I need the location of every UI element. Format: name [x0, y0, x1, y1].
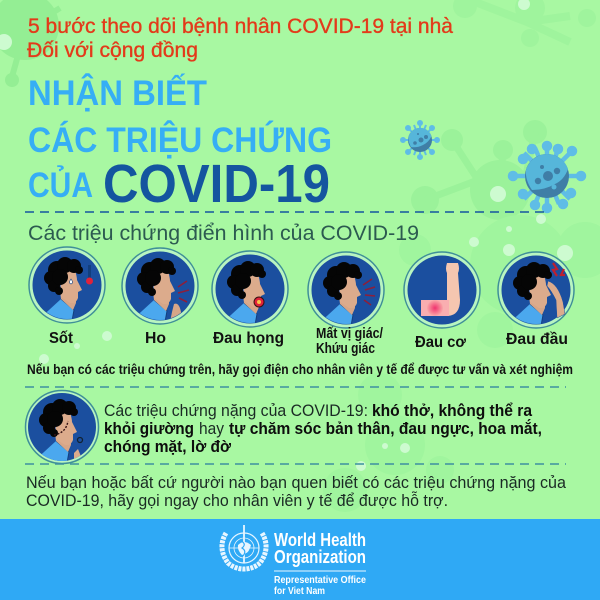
- panel: headache: [498, 252, 574, 348]
- label: sore throat: Đau họng: [213, 330, 284, 347]
- label: headache: Đau đầu: [506, 331, 568, 348]
- icon: sore throat: [212, 251, 288, 329]
- text: organisation name: Organization: [274, 547, 366, 567]
- panel: cough: [122, 248, 198, 347]
- text: organisation name: [274, 530, 366, 597]
- title: program heading: 5 bước theo dõi bệnh nhân COVID-19 tại nhà: [28, 15, 453, 38]
- text: call health worker: [26, 474, 567, 510]
- text: organisation name: for Viet Nam: [274, 586, 325, 597]
- label: muscle pain: Đau cơ: [415, 334, 467, 351]
- icon: WHO emblem: [222, 525, 266, 569]
- text: severe symptoms: chóng mặt, lờ đờ: [104, 438, 231, 456]
- subheading: typical symptoms: Các triệu chứng điển hình của COVID-19: [28, 222, 419, 245]
- heading: recognise symptoms of COVID-19: COVID-19: [103, 154, 330, 214]
- panel: sore throat: [212, 251, 288, 347]
- panel: fever: [29, 247, 105, 347]
- heading: recognise symptoms of COVID-19: CỦA: [28, 165, 93, 205]
- divider: [25, 386, 566, 388]
- panel: severe symptoms: [26, 390, 542, 467]
- icon: small virus: [401, 121, 439, 159]
- panel: loss of taste and smell: [308, 252, 384, 357]
- text: call health worker: Nếu bạn hoặc bất cứ người nào bạn quen biết có các triệu chứng nặng của: [26, 474, 567, 492]
- heading: recognise symptoms of COVID-19: [28, 73, 332, 214]
- text: severe symptoms: [104, 402, 542, 456]
- text: severe symptoms: khó thở, không thể ra: [372, 402, 533, 420]
- icon: loss of taste and smell: [308, 252, 384, 330]
- panel: footer: [0, 519, 600, 600]
- icon: large virus: [510, 143, 584, 211]
- text: severe symptoms: tự chăm sóc bản thân, đau ngực, hoa mắt,: [229, 419, 542, 438]
- text: severe symptoms: hay: [199, 420, 225, 438]
- text: organisation name: World Health: [274, 530, 366, 550]
- divider: [25, 211, 547, 213]
- label: cough: Ho: [145, 330, 166, 347]
- label: loss of taste and smell: Mất vị giác/: [316, 325, 384, 342]
- label: loss of taste and smell: [316, 325, 384, 357]
- icon: muscle pain: [404, 252, 480, 328]
- label: fever: Sốt: [49, 330, 74, 347]
- icon: fever: [29, 247, 105, 325]
- text: call health worker: COVID-19, hãy gọi ngay cho nhân viên y tế để được hỗ trợ.: [26, 491, 448, 510]
- title: program heading: [27, 15, 453, 62]
- text: severe symptoms: Các triệu chứng nặng của COVID-19:: [104, 402, 368, 420]
- text: organisation name: Representative Office: [274, 575, 366, 586]
- text: severe symptoms: khỏi giường: [104, 420, 194, 438]
- divider: [25, 463, 566, 465]
- heading: recognise symptoms of COVID-19: NHẬN BIẾT: [28, 73, 207, 113]
- title: program heading: Đối với cộng đồng: [27, 39, 198, 62]
- icon: breathing difficulty: [26, 390, 98, 467]
- panel: muscle pain: [404, 252, 480, 351]
- icon: headache: [498, 252, 574, 330]
- heading: recognise symptoms of COVID-19: CÁC TRIỆU CHỨNG: [28, 120, 332, 160]
- icon: cough: [122, 248, 198, 326]
- label: loss of taste and smell: Khứu giác: [316, 340, 375, 357]
